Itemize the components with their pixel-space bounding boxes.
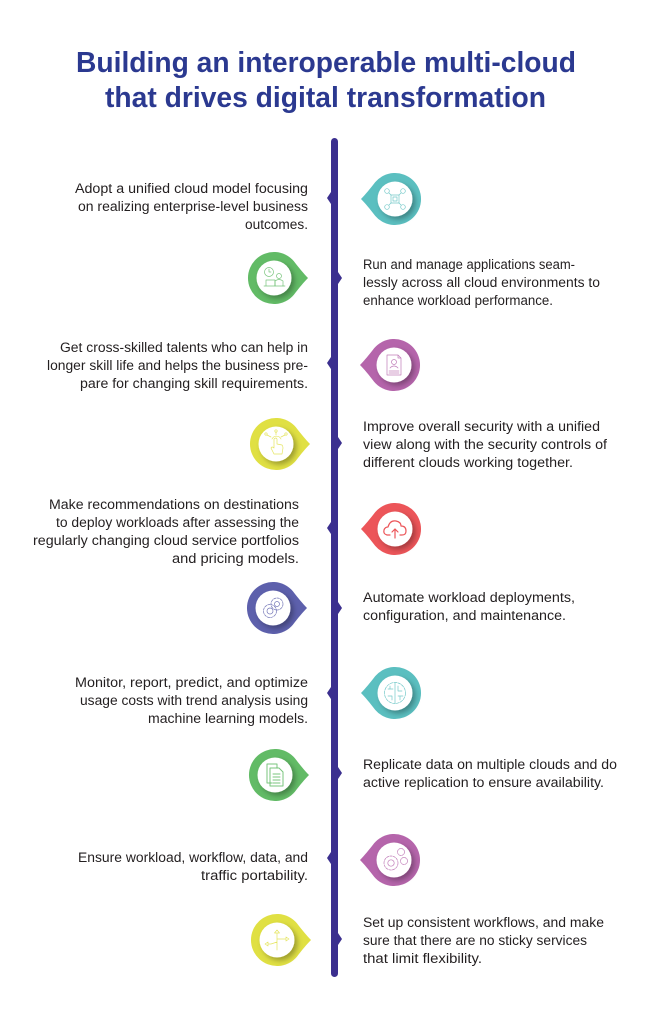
step 6 text: configuration, and maintenance. [363, 608, 566, 623]
icon: documents pin [249, 749, 309, 801]
step 3 text: pare for changing skill requirements. [80, 376, 308, 391]
step 9 text [78, 850, 308, 883]
icon: cog cluster pin [360, 834, 420, 886]
step 4 text [363, 419, 607, 470]
step 8 text: active replication to ensure availability. [363, 775, 604, 790]
step 9 text: Ensure workload, workflow, data, and [78, 850, 308, 865]
step 10 text: that limit flexibility. [363, 951, 482, 966]
step 2 text: enhance workload performance. [363, 293, 553, 308]
icon: network pin [361, 173, 421, 225]
step 3 text [47, 340, 308, 391]
step 1 text: on realizing enterprise-level business [78, 199, 308, 214]
step 1 text [75, 181, 308, 232]
icon: direction arrows pin [251, 914, 311, 966]
step 3 text: Get cross-skilled talents who can help in [60, 340, 308, 355]
title: Building an interoperable multi-cloud [76, 47, 576, 79]
title: that drives digital transformation [105, 82, 546, 114]
step 2 text: lessly across all cloud environments to [363, 275, 600, 290]
step 6 text [363, 590, 575, 623]
icon: cloud upload pin [361, 503, 421, 555]
icon: clock and person pin [248, 252, 308, 304]
step 5 text: to deploy workloads after assessing the [56, 515, 299, 530]
icon: brain pin [361, 667, 421, 719]
step 4 text: different clouds working together. [363, 455, 573, 470]
step 1 text: outcomes. [245, 217, 308, 232]
step 5 text: regularly changing cloud service portfolios [33, 533, 299, 548]
step 10 text: Set up consistent workflows, and make [363, 915, 604, 930]
step 10 text: sure that there are no sticky services [363, 933, 587, 948]
step 7 text: Monitor, report, predict, and optimize [75, 675, 308, 690]
step 8 text [363, 757, 617, 790]
step 9 text: traffic portability. [201, 868, 308, 883]
icon: resume document pin [360, 339, 420, 391]
step 7 text: usage costs with trend analysis using [80, 693, 308, 708]
step 7 text [75, 675, 308, 726]
step 4 text: view along with the security controls of [363, 437, 607, 452]
title [76, 47, 576, 114]
icon: touch hand pin [250, 418, 310, 470]
step 2 text: Run and manage applications seam- [363, 257, 575, 272]
step 3 text: longer skill life and helps the business pre- [47, 358, 308, 373]
step 4 text: Improve overall security with a unified [363, 419, 600, 434]
step 10 text [363, 915, 604, 966]
step 5 text: Make recommendations on destinations [49, 497, 299, 512]
step 5 text: and pricing models. [172, 551, 299, 566]
step 8 text: Replicate data on multiple clouds and do [363, 757, 617, 772]
step 2 text [363, 257, 600, 308]
step 7 text: machine learning models. [148, 711, 308, 726]
step 6 text: Automate workload deployments, [363, 590, 575, 605]
step 1 text: Adopt a unified cloud model focusing [75, 181, 308, 196]
step 5 text [33, 497, 299, 566]
central timeline [327, 138, 342, 977]
icon: gears pin [247, 582, 307, 634]
